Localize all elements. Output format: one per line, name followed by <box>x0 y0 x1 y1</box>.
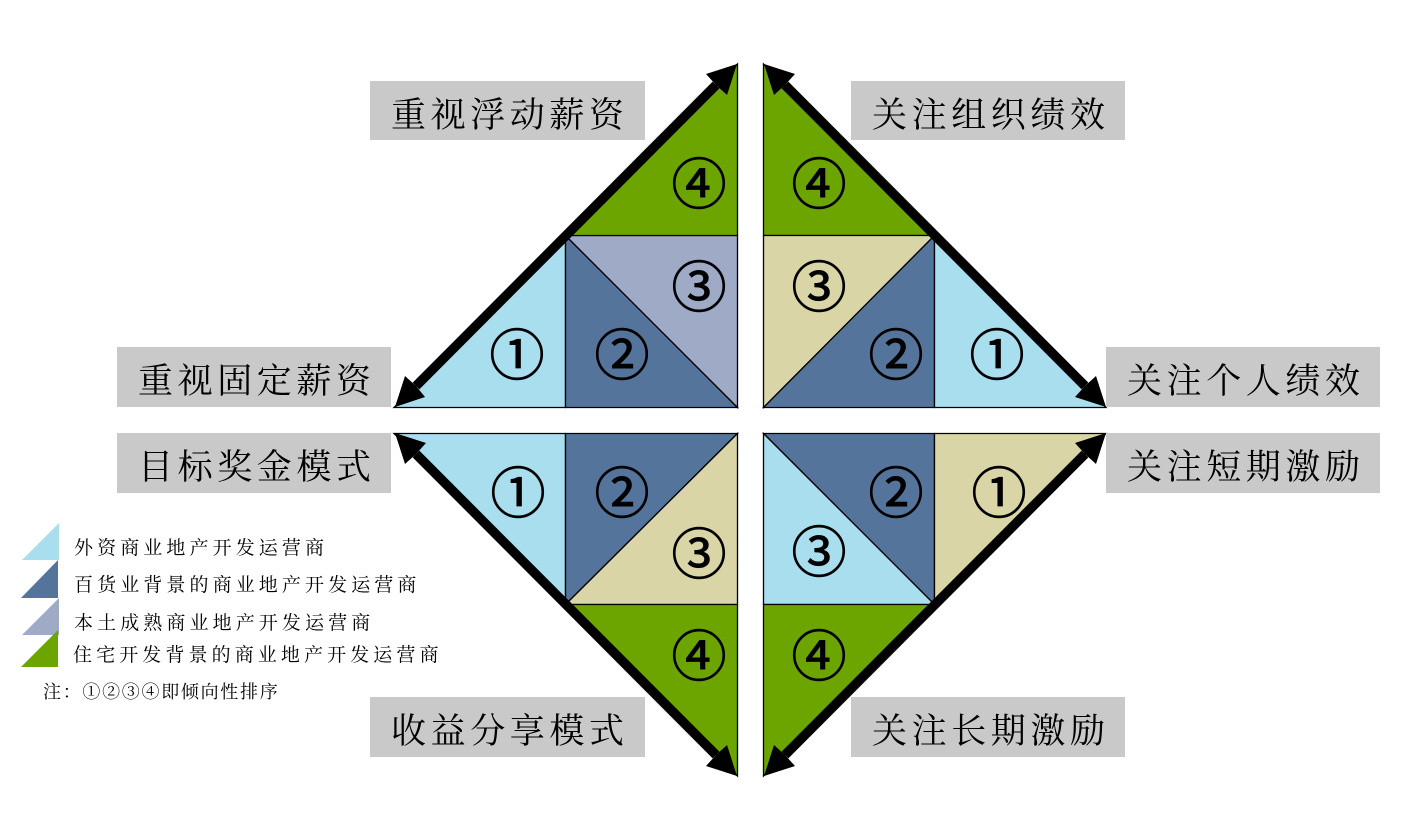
segment 1 <box>934 434 1106 604</box>
rank 2: ② <box>868 311 924 391</box>
segment 1 <box>934 236 1106 408</box>
panel: top-left diamond quadrant <box>394 64 738 408</box>
rank 3: ③ <box>671 243 727 323</box>
rank 2: ② <box>868 449 924 529</box>
segment 4 <box>764 64 934 236</box>
legend swatch: foreign developers <box>22 523 59 560</box>
rank 1: ① <box>969 311 1025 391</box>
note: 注：①②③④即倾向性排序 <box>43 682 279 702</box>
legend swatch: residential developers <box>21 630 58 667</box>
legend swatch: mature local developers <box>22 598 59 635</box>
legend swatch: department store developers <box>21 560 58 598</box>
rank 4: ④ <box>791 140 847 220</box>
rank 2: ② <box>594 449 650 529</box>
arrow: short-term to long-term incentive <box>764 433 1106 776</box>
segment 3 <box>764 434 934 604</box>
arrow: individual to organisation performance <box>764 64 1106 407</box>
rank 4: ④ <box>671 140 727 220</box>
legend text: mature local developers: 本土成熟商业地产开发运营商 <box>74 612 374 634</box>
segment 4 <box>566 64 738 236</box>
label: long-term incentive: 关注长期激励 <box>872 712 1110 751</box>
label: short-term incentive: 关注短期激励 <box>1127 448 1365 487</box>
label: long-term incentive <box>851 697 1125 757</box>
rank 2: ② <box>594 311 650 391</box>
label: individual performance <box>1106 347 1380 407</box>
panel: bottom-right diamond quadrant <box>764 434 1106 776</box>
rank 3: ③ <box>791 508 847 588</box>
rank 4: ④ <box>671 612 727 692</box>
legend <box>21 523 443 667</box>
rank 1: ① <box>490 449 546 529</box>
legend text: department store developers: 百货业背景的商业地产开发运营商 <box>74 574 421 596</box>
label: target bonus <box>117 433 391 493</box>
rank 3: ③ <box>791 243 847 323</box>
segment 2 <box>566 434 738 604</box>
panel: bottom-left diamond quadrant <box>394 434 738 776</box>
rank 1: ① <box>489 311 545 391</box>
panel: top-right diamond quadrant <box>764 64 1106 408</box>
legend text: residential developers: 住宅开发背景的商业地产开发运营商 <box>73 644 443 666</box>
label: organisation performance <box>851 81 1125 140</box>
label: organisation performance: 关注组织绩效 <box>872 96 1110 135</box>
label: short-term incentive <box>1106 433 1380 493</box>
legend text: foreign developers: 外资商业地产开发运营商 <box>74 537 328 559</box>
label: floating pay <box>370 81 645 140</box>
segment 2 <box>566 236 738 408</box>
segment 3 <box>566 434 738 604</box>
rank 3: ③ <box>671 510 727 590</box>
label: floating pay: 重视浮动薪资 <box>391 96 629 135</box>
rank 4: ④ <box>791 612 847 692</box>
segment 2 <box>764 236 934 408</box>
arrow: target bonus to profit sharing <box>395 433 737 776</box>
segment 1 <box>394 434 566 604</box>
segment 1 <box>394 236 566 408</box>
segment 3 <box>764 236 934 408</box>
segment 4 <box>764 604 934 776</box>
label: profit sharing <box>370 697 645 757</box>
label: individual performance: 关注个人绩效 <box>1127 362 1365 401</box>
segment 2 <box>764 434 934 604</box>
label: fixed pay <box>117 347 391 407</box>
segment 4 <box>566 604 738 776</box>
arrow: fixed pay to floating pay <box>395 64 737 407</box>
segment 3 <box>566 236 738 408</box>
label: fixed pay: 重视固定薪资 <box>138 362 376 401</box>
label: profit sharing: 收益分享模式 <box>391 712 629 751</box>
label: target bonus: 目标奖金模式 <box>138 448 376 487</box>
rank 1: ① <box>971 449 1027 529</box>
